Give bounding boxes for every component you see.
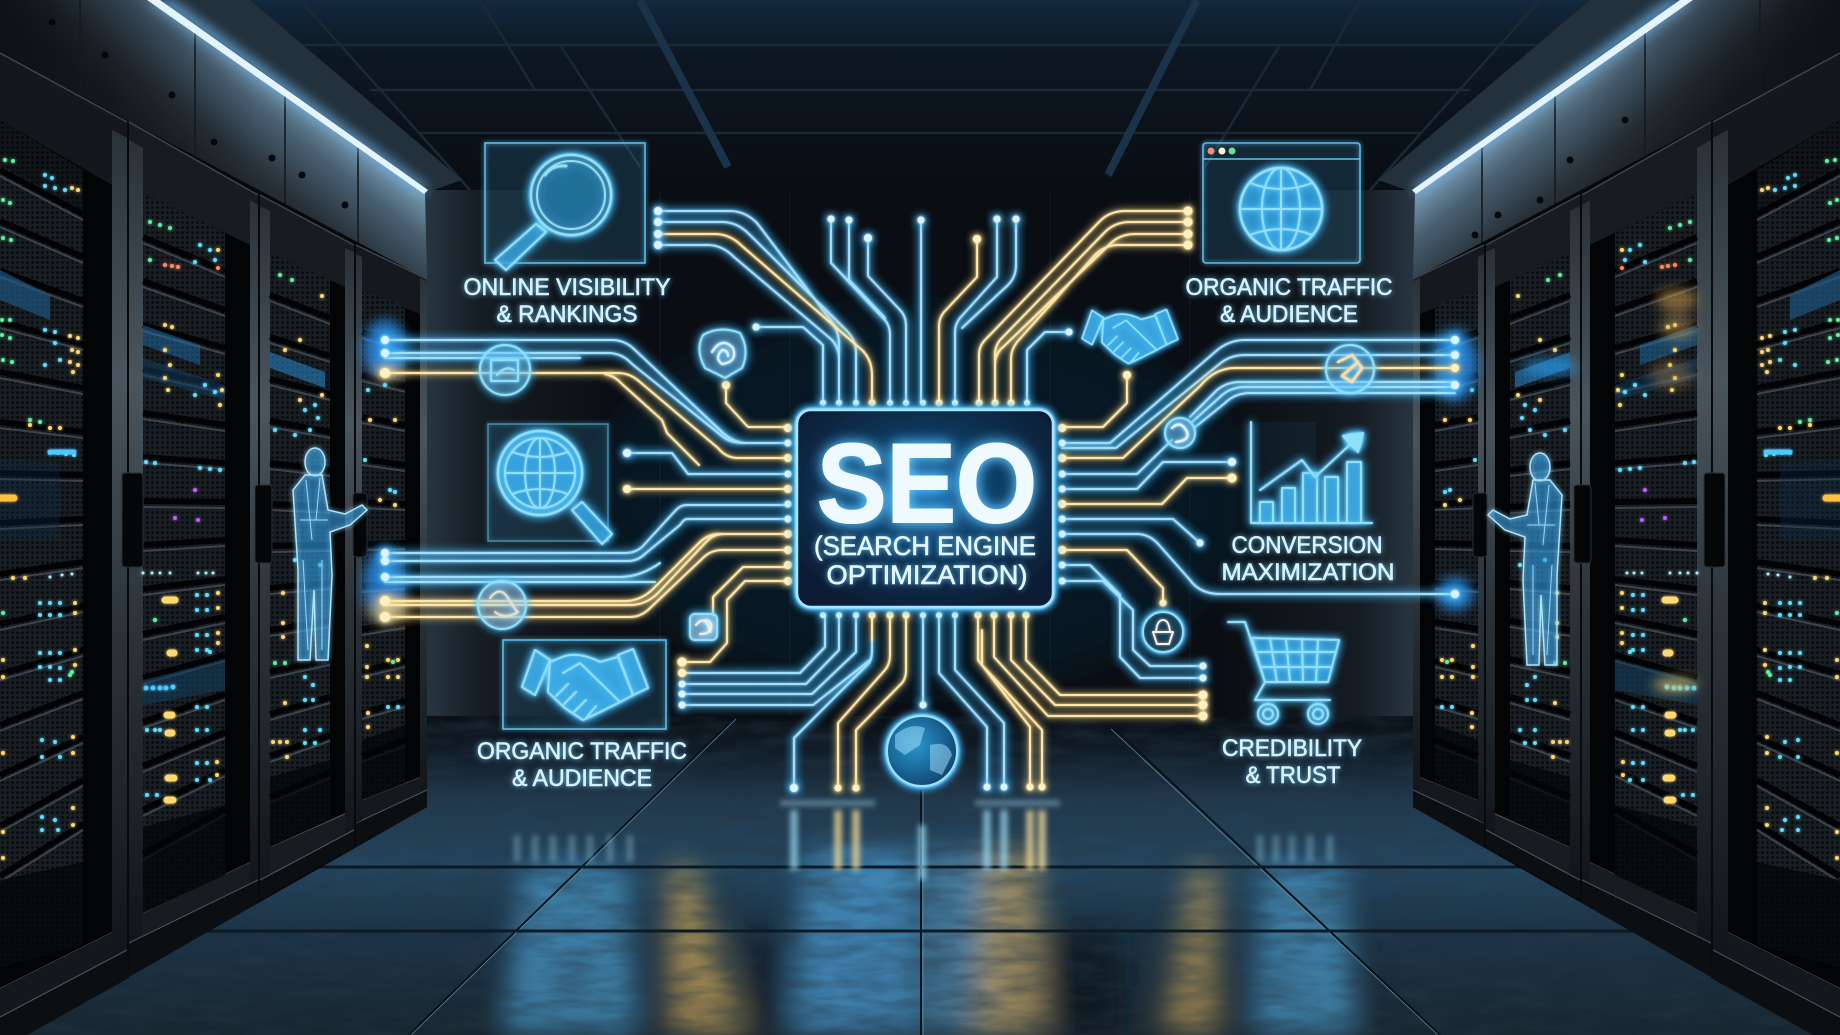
panel: search globe (488, 424, 612, 544)
label: organic traffic and audience bottom: & AUDIENCE (512, 765, 652, 792)
ceiling soffit left (165, 0, 462, 192)
icon: swirl badge upper left (699, 329, 746, 378)
panel: online visibility and rankings (464, 143, 670, 328)
connector pins and end dots: gold (380, 206, 1459, 792)
ceiling light strip right (1412, 0, 1693, 194)
floor (0, 716, 1840, 1035)
connector glow nodes on racks (363, 320, 1477, 624)
icon: badge on right trunk (1326, 345, 1374, 393)
central SEO chip (797, 410, 1053, 607)
door handles (122, 473, 1725, 567)
icon: shopping basket badge (1143, 612, 1183, 652)
label: organic traffic and audience: ORGANIC TRAFFIC (1186, 274, 1392, 301)
icon: globe with magnifier (498, 431, 612, 544)
label: online visibility (464, 274, 670, 328)
icon: shopping cart (1228, 622, 1339, 724)
chip subtitle: (SEARCH ENGINE (814, 531, 1036, 561)
icon: globe (1240, 168, 1322, 250)
panel: handshake (477, 640, 687, 792)
label: conversion maximization (1222, 532, 1394, 586)
icon: window controls (1208, 148, 1236, 154)
ceiling light strip left (147, 0, 428, 194)
icon: floating handshake (1082, 310, 1178, 364)
upper side wall right (1413, 0, 1840, 279)
label: credibility and trust: CREDIBILITY (1222, 735, 1362, 762)
floor light reflections (500, 850, 1360, 1035)
ceiling (147, 0, 1693, 193)
icon: badge on lower left trunk (478, 581, 526, 629)
connector pins and end dots: blue (381, 207, 1459, 792)
label: organic traffic and audience bottom (477, 738, 687, 792)
traces: blue circuit lines (385, 211, 1455, 788)
label: credibility and trust: & TRUST (1246, 762, 1341, 789)
icon: handshake (522, 649, 648, 720)
ceiling soffit right (1378, 0, 1675, 192)
label: conversion maximization: MAXIMIZATION (1222, 559, 1394, 586)
chip title SEO: SEO (817, 421, 1037, 546)
chip subtitle: OPTIMIZATION) (826, 560, 1028, 590)
right server racks (1413, 53, 1840, 1035)
label: online visibility: & RANKINGS (496, 301, 638, 328)
label: online visibility: ONLINE VISIBILITY (464, 274, 670, 301)
traces: gold circuit lines (385, 211, 1455, 788)
arrow: growth trend (1260, 433, 1363, 490)
hologram person left (293, 448, 367, 660)
warm panels on right racks (1522, 288, 1697, 692)
label: conversion maximization: CONVERSION (1232, 532, 1382, 559)
label: organic traffic and audience: & AUDIENCE (1220, 301, 1358, 328)
label: organic traffic and audience (1186, 274, 1392, 328)
icon: magnifying glass (495, 155, 611, 270)
label: organic traffic and audience bottom: ORGANIC TRAFFIC (477, 738, 687, 765)
panel: organic traffic top right (1186, 143, 1392, 328)
icon: small swirl near bottom left (690, 614, 717, 640)
icon: bottom globe (887, 716, 957, 786)
icon: badge on left trunk (480, 345, 530, 395)
left server racks (0, 53, 427, 1035)
label: credibility and trust (1222, 735, 1362, 789)
chart bars (1251, 422, 1372, 523)
chip subtitle (814, 531, 1036, 590)
upper side wall left (0, 0, 427, 279)
hologram person right (1488, 453, 1562, 665)
back wall (420, 190, 1420, 720)
chart: conversion growth (1222, 422, 1394, 586)
icon: small knot on right traces (1165, 418, 1195, 448)
